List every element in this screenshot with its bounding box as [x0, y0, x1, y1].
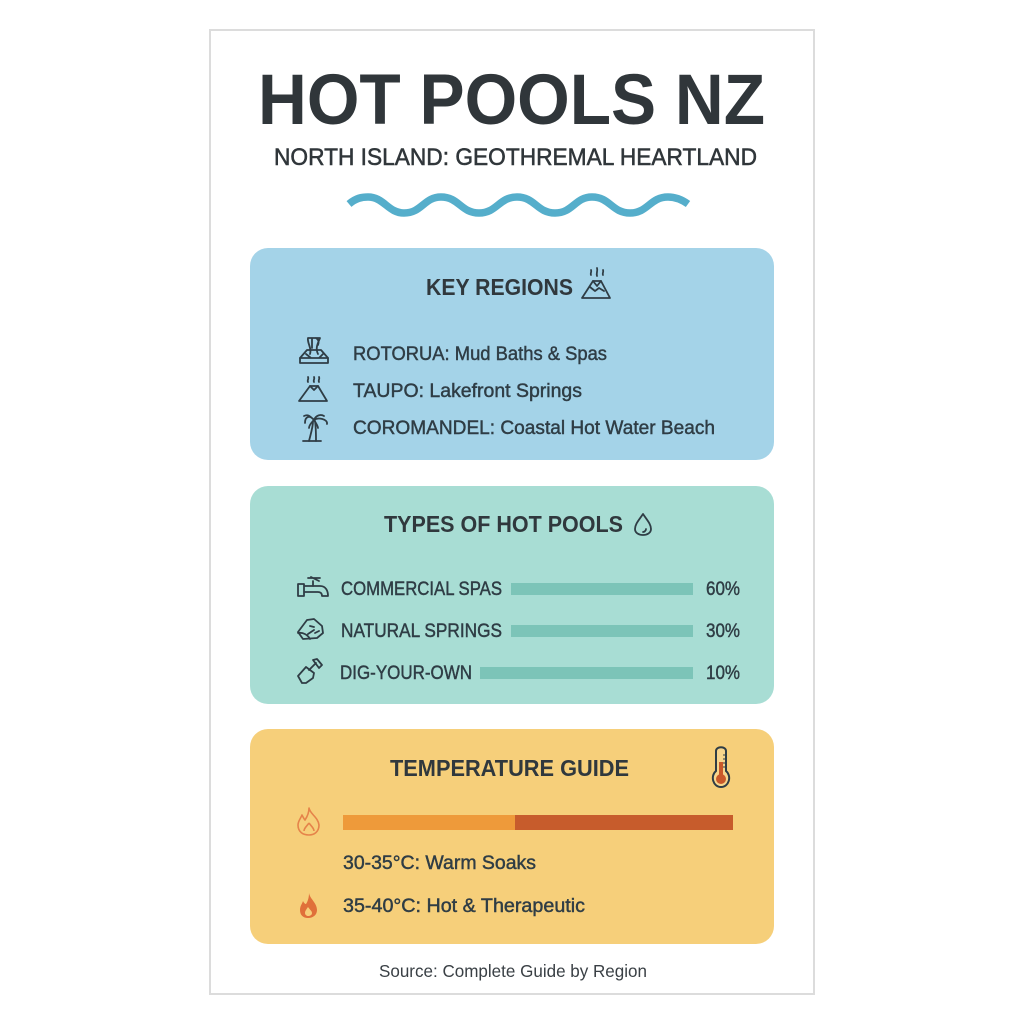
panel: temperature guide	[250, 729, 774, 944]
text: warm soaks: 30-35°C: Warm Soaks	[343, 852, 536, 874]
icon: rock	[298, 619, 323, 639]
temperature bar	[343, 815, 733, 830]
icon: water drop	[635, 514, 651, 535]
value: 60%: 60%	[706, 578, 740, 600]
title: HOT POOLS NZ	[258, 61, 765, 140]
text: commercial spas: COMMERCIAL SPAS	[341, 578, 502, 600]
bar: commercial spas	[511, 583, 693, 595]
text: coromandel: COROMANDEL: Coastal Hot Water Beach	[353, 417, 715, 439]
icon: steaming volcano	[299, 377, 327, 401]
icon: volcano heading	[582, 268, 610, 298]
panel: key regions	[250, 248, 774, 460]
heading: types: TYPES OF HOT POOLS	[384, 511, 623, 537]
text: rotorua: ROTORUA: Mud Baths & Spas	[353, 343, 607, 365]
text: natural springs: NATURAL SPRINGS	[341, 620, 502, 642]
icon: shovel	[298, 659, 322, 683]
subtitle: NORTH ISLAND: GEOTHREMAL HEARTLAND	[274, 144, 757, 171]
heading: temperature: TEMPERATURE GUIDE	[390, 755, 629, 781]
value: 10%: 10%	[706, 662, 740, 684]
wave divider	[349, 197, 688, 213]
icon: mud pool	[300, 338, 328, 363]
icon: tap	[298, 577, 328, 596]
text: dig-your-own: DIG-YOUR-OWN	[340, 662, 472, 684]
text: hot and therapeutic: 35-40°C: Hot & Therapeutic	[343, 895, 585, 917]
heading: key regions: KEY REGIONS	[426, 274, 573, 300]
icon: palm tree	[303, 415, 327, 441]
bar: natural springs	[511, 625, 693, 637]
icon: outlined flame	[298, 808, 319, 835]
icon: thermometer	[713, 747, 729, 787]
icon: solid flame	[300, 893, 317, 918]
value: 30%: 30%	[706, 620, 740, 642]
source note: Source: Complete Guide by Region	[379, 961, 647, 981]
text: taupo: TAUPO: Lakefront Springs	[353, 380, 582, 402]
bar: dig-your-own	[480, 667, 693, 679]
panel: types of hot pools	[250, 486, 774, 704]
